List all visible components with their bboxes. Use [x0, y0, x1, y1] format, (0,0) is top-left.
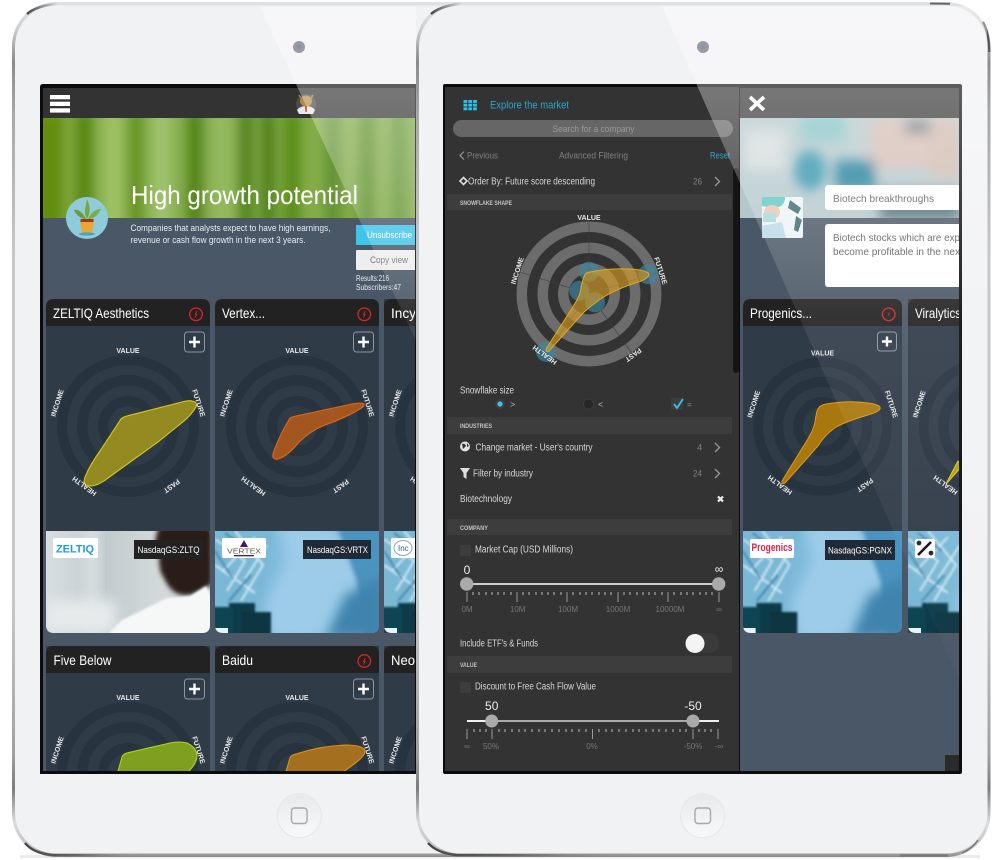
section band: company	[447, 519, 732, 535]
discount slider: 50%	[483, 742, 499, 751]
radar filter chart: PAST	[623, 346, 642, 363]
radar chart: FUTURE	[359, 389, 375, 418]
reset link: Reset	[710, 150, 730, 162]
logo: ZELTIQ	[53, 538, 98, 558]
filter by industry row: Filter by industry	[473, 469, 533, 480]
radar chart: VALUE	[811, 350, 834, 358]
radar chart: VALUE	[116, 695, 140, 702]
card: Progenics	[733, 299, 908, 639]
radar chart: INCOME	[219, 389, 235, 418]
search box	[453, 120, 733, 137]
snowflake size options: =	[687, 400, 692, 410]
ticker: NasdaqGS:PGNX	[825, 540, 895, 560]
card title: Neo	[391, 652, 415, 668]
section band: value: VALUE	[460, 662, 478, 669]
photo: lab	[384, 531, 415, 633]
glare: left tablet	[260, 7, 416, 341]
radar chart	[50, 695, 206, 771]
results and subscribers: Subscribers:47	[356, 283, 401, 292]
radar chart: INCOME	[388, 389, 404, 418]
radar filter chart	[510, 215, 668, 366]
icon: biotech scientist	[762, 197, 803, 238]
right tablet camera	[697, 41, 709, 53]
title field	[825, 185, 965, 210]
change market row	[460, 442, 720, 454]
filter by industry row: 24	[693, 469, 702, 480]
right tablet body	[416, 2, 990, 857]
radar chart: INCOME	[912, 390, 928, 419]
photo: lab	[215, 531, 379, 633]
text: Advanced Filtering: Advanced Filtering	[559, 150, 628, 162]
section band: company: COMPANY	[460, 525, 489, 532]
copy view button: Copy view	[370, 255, 408, 266]
ticker: NasdaqGS:VRTX: NasdaqGS:VRTX	[307, 545, 369, 556]
icon: close	[750, 97, 764, 110]
logo: Progenics	[750, 539, 794, 558]
icon: potted plant badge	[66, 197, 108, 239]
include funds toggle: Include ETF's & Funds	[460, 639, 538, 650]
change market row: Change market - User's country	[476, 443, 592, 454]
banner photo: biotech lab	[740, 112, 960, 220]
biotechnology row	[460, 494, 723, 505]
radar chart	[747, 350, 898, 496]
section band: industries: INDUSTRIES	[460, 423, 493, 430]
radar filter chart: HEALTH	[532, 343, 559, 365]
radar filter chart: FUTURE	[652, 256, 668, 286]
radar filter chart: VALUE	[577, 215, 601, 222]
heading: Explore the market: Explore the market	[490, 100, 569, 112]
discount slider: 0%	[586, 742, 598, 751]
include funds toggle	[460, 633, 719, 653]
radar filter chart: INCOME	[510, 256, 526, 285]
card: Vertex	[215, 299, 379, 633]
card: Viralytics (cropped)	[898, 299, 1000, 639]
heading: High growth potential: High growth potential	[131, 180, 358, 210]
title field: Biotech breakthroughs	[833, 193, 934, 205]
discount slider: 50	[485, 699, 499, 713]
section band: value	[447, 656, 732, 673]
icon: red alert	[190, 308, 202, 321]
description text	[130, 224, 330, 245]
search box: Search for a company	[552, 124, 635, 135]
description field: Biotech stocks which are exp	[833, 232, 960, 244]
section band: snowflake shape	[447, 194, 732, 210]
panel: filter sidebar	[445, 87, 739, 771]
radar chart	[388, 377, 415, 484]
logo: Incyte	[391, 538, 415, 558]
card title: Vertex...	[222, 305, 265, 321]
right top bar	[740, 88, 959, 118]
ticker: NasdaqGS:ZLTQ	[134, 540, 203, 559]
discount slider: -∞	[715, 742, 723, 751]
radar chart: HEALTH	[767, 473, 794, 495]
icon: plus button	[354, 332, 374, 352]
icon: red alert	[358, 308, 371, 321]
glare: right tablet	[662, 6, 987, 743]
market cap slider: 0	[464, 563, 471, 577]
card title: Incy	[391, 305, 416, 321]
radar chart	[219, 348, 375, 497]
unsubscribe button: Unsubscribe	[367, 230, 412, 241]
snowflake size label: Snowflake size	[460, 386, 514, 396]
biotechnology row: Biotechnology	[460, 494, 512, 505]
card title: ZELTIQ Aesthetics	[53, 305, 149, 321]
right body background	[740, 88, 959, 771]
radar chart: HEALTH	[240, 474, 267, 496]
copy view button	[356, 250, 418, 270]
icon: red alert	[358, 655, 371, 667]
left tablet home button	[277, 794, 321, 838]
radar chart	[219, 695, 375, 844]
photo: lab	[908, 531, 959, 633]
results and subscribers: Results:216	[356, 274, 389, 283]
right screen content	[733, 88, 1000, 771]
discount filter label: Discount to Free Cash Flow Value	[475, 682, 596, 693]
description field	[825, 224, 965, 287]
market cap slider: 10000M	[656, 605, 685, 614]
unsubscribe button	[356, 225, 418, 245]
photo: scientist	[46, 531, 210, 633]
results and subscribers	[356, 275, 401, 290]
radar chart: VALUE	[116, 348, 140, 355]
left screen	[43, 88, 415, 771]
radar chart: HEALTH	[933, 473, 959, 495]
market cap slider: 0M	[461, 605, 473, 614]
radar chart: VALUE	[285, 348, 309, 355]
radar chart	[50, 348, 206, 497]
card: Neo (cropped)	[384, 646, 537, 844]
description text: revenue or cash flow growth in the next 3 years.	[130, 235, 306, 246]
radar chart: HEALTH	[409, 474, 436, 496]
order by row: Order By: Future score descending	[468, 176, 595, 188]
radar chart: INCOME	[50, 389, 66, 418]
logo: Vertex: VERTEX	[227, 548, 261, 556]
left screen body background	[43, 218, 415, 771]
logo: Progenics: Progenics	[752, 542, 792, 554]
icon: plus button	[354, 679, 374, 699]
section band: industries	[447, 417, 732, 434]
icon: plus button	[878, 332, 896, 351]
snowflake size options: <	[598, 400, 603, 410]
right tablet screen frame	[443, 84, 962, 774]
description text: Companies that analysts expect to have high earnings,	[130, 223, 330, 234]
logo: syringe icon	[915, 539, 935, 558]
logo: Incyte: Inc	[398, 544, 409, 553]
radar chart: PAST	[855, 476, 874, 493]
sidebar scrollbar	[733, 168, 739, 373]
discount slider: -50	[684, 699, 702, 713]
icon: hamburger menu	[50, 95, 70, 113]
radar chart	[388, 702, 537, 844]
market cap slider: 1000M	[606, 605, 631, 614]
discount slider: -50%	[684, 742, 702, 751]
card title: Baidu	[222, 652, 253, 668]
radar chart: VALUE	[285, 695, 309, 702]
radar chart: PAST	[161, 477, 181, 494]
right tablet home button	[681, 794, 725, 838]
radar chart: FUTURE	[190, 736, 206, 765]
previous link: Previous	[467, 150, 498, 162]
card: Five Below	[46, 646, 210, 771]
icon: plus button	[184, 679, 204, 699]
discount slider	[464, 699, 723, 751]
radar chart: FUTURE	[883, 390, 898, 419]
market cap slider: ∞	[715, 562, 723, 576]
card: Baidu	[215, 646, 379, 771]
change market row: 4	[697, 443, 702, 454]
radar chart: INCOME	[219, 736, 235, 765]
market cap filter label: Market Cap (USD Millions)	[475, 545, 573, 556]
snowflake size options	[495, 398, 692, 410]
radar chart: HEALTH	[71, 474, 98, 496]
market cap slider: 100M	[558, 605, 578, 614]
left tablet camera	[293, 41, 305, 53]
order by row	[460, 176, 720, 188]
photo: lab	[733, 521, 908, 639]
logo: Vertex	[222, 538, 266, 558]
ticker: NasdaqGS:ZLTQ: NasdaqGS:ZLTQ	[138, 545, 200, 556]
radar chart: FUTURE	[359, 736, 375, 765]
order by row: 26	[693, 176, 702, 188]
logo: ZELTIQ: ZELTIQ	[56, 544, 94, 556]
market cap slider: 10M	[510, 605, 526, 614]
icon: bull avatar	[296, 94, 316, 114]
radar chart: PAST	[330, 477, 350, 494]
card: Incy (cropped)	[384, 299, 415, 633]
radar chart	[912, 357, 1000, 496]
radar chart: INCOME	[747, 390, 762, 419]
market cap slider	[460, 562, 725, 614]
description field: become profitable in the nex	[833, 246, 961, 258]
card: ZELTIQ Aesthetics	[46, 299, 214, 640]
radar chart: FUTURE	[190, 389, 206, 418]
left top bar	[43, 88, 415, 118]
radar chart: INCOME	[388, 736, 404, 765]
card title: Five Below	[54, 652, 112, 668]
banner photo: bamboo	[43, 118, 415, 218]
snowflake size options: >	[510, 400, 515, 410]
bottom corner tab	[945, 755, 959, 771]
icon: red alert	[882, 308, 895, 321]
discount slider: ∞	[464, 742, 470, 751]
section band: snowflake shape: SNOWFLAKE SHAPE	[460, 200, 513, 207]
icon: grid	[464, 100, 477, 110]
radar chart: INCOME	[50, 736, 66, 765]
left tablet screen frame	[40, 84, 416, 774]
filter by industry row	[460, 468, 720, 480]
icon: plus button	[184, 332, 204, 352]
ticker: NasdaqGS:PGNX: NasdaqGS:PGNX	[828, 546, 893, 556]
market cap slider: ∞	[716, 605, 722, 614]
ticker: NasdaqGS:VRTX	[303, 540, 371, 559]
card title: Progenics...	[750, 305, 812, 321]
card title: Viralytics	[915, 305, 961, 321]
